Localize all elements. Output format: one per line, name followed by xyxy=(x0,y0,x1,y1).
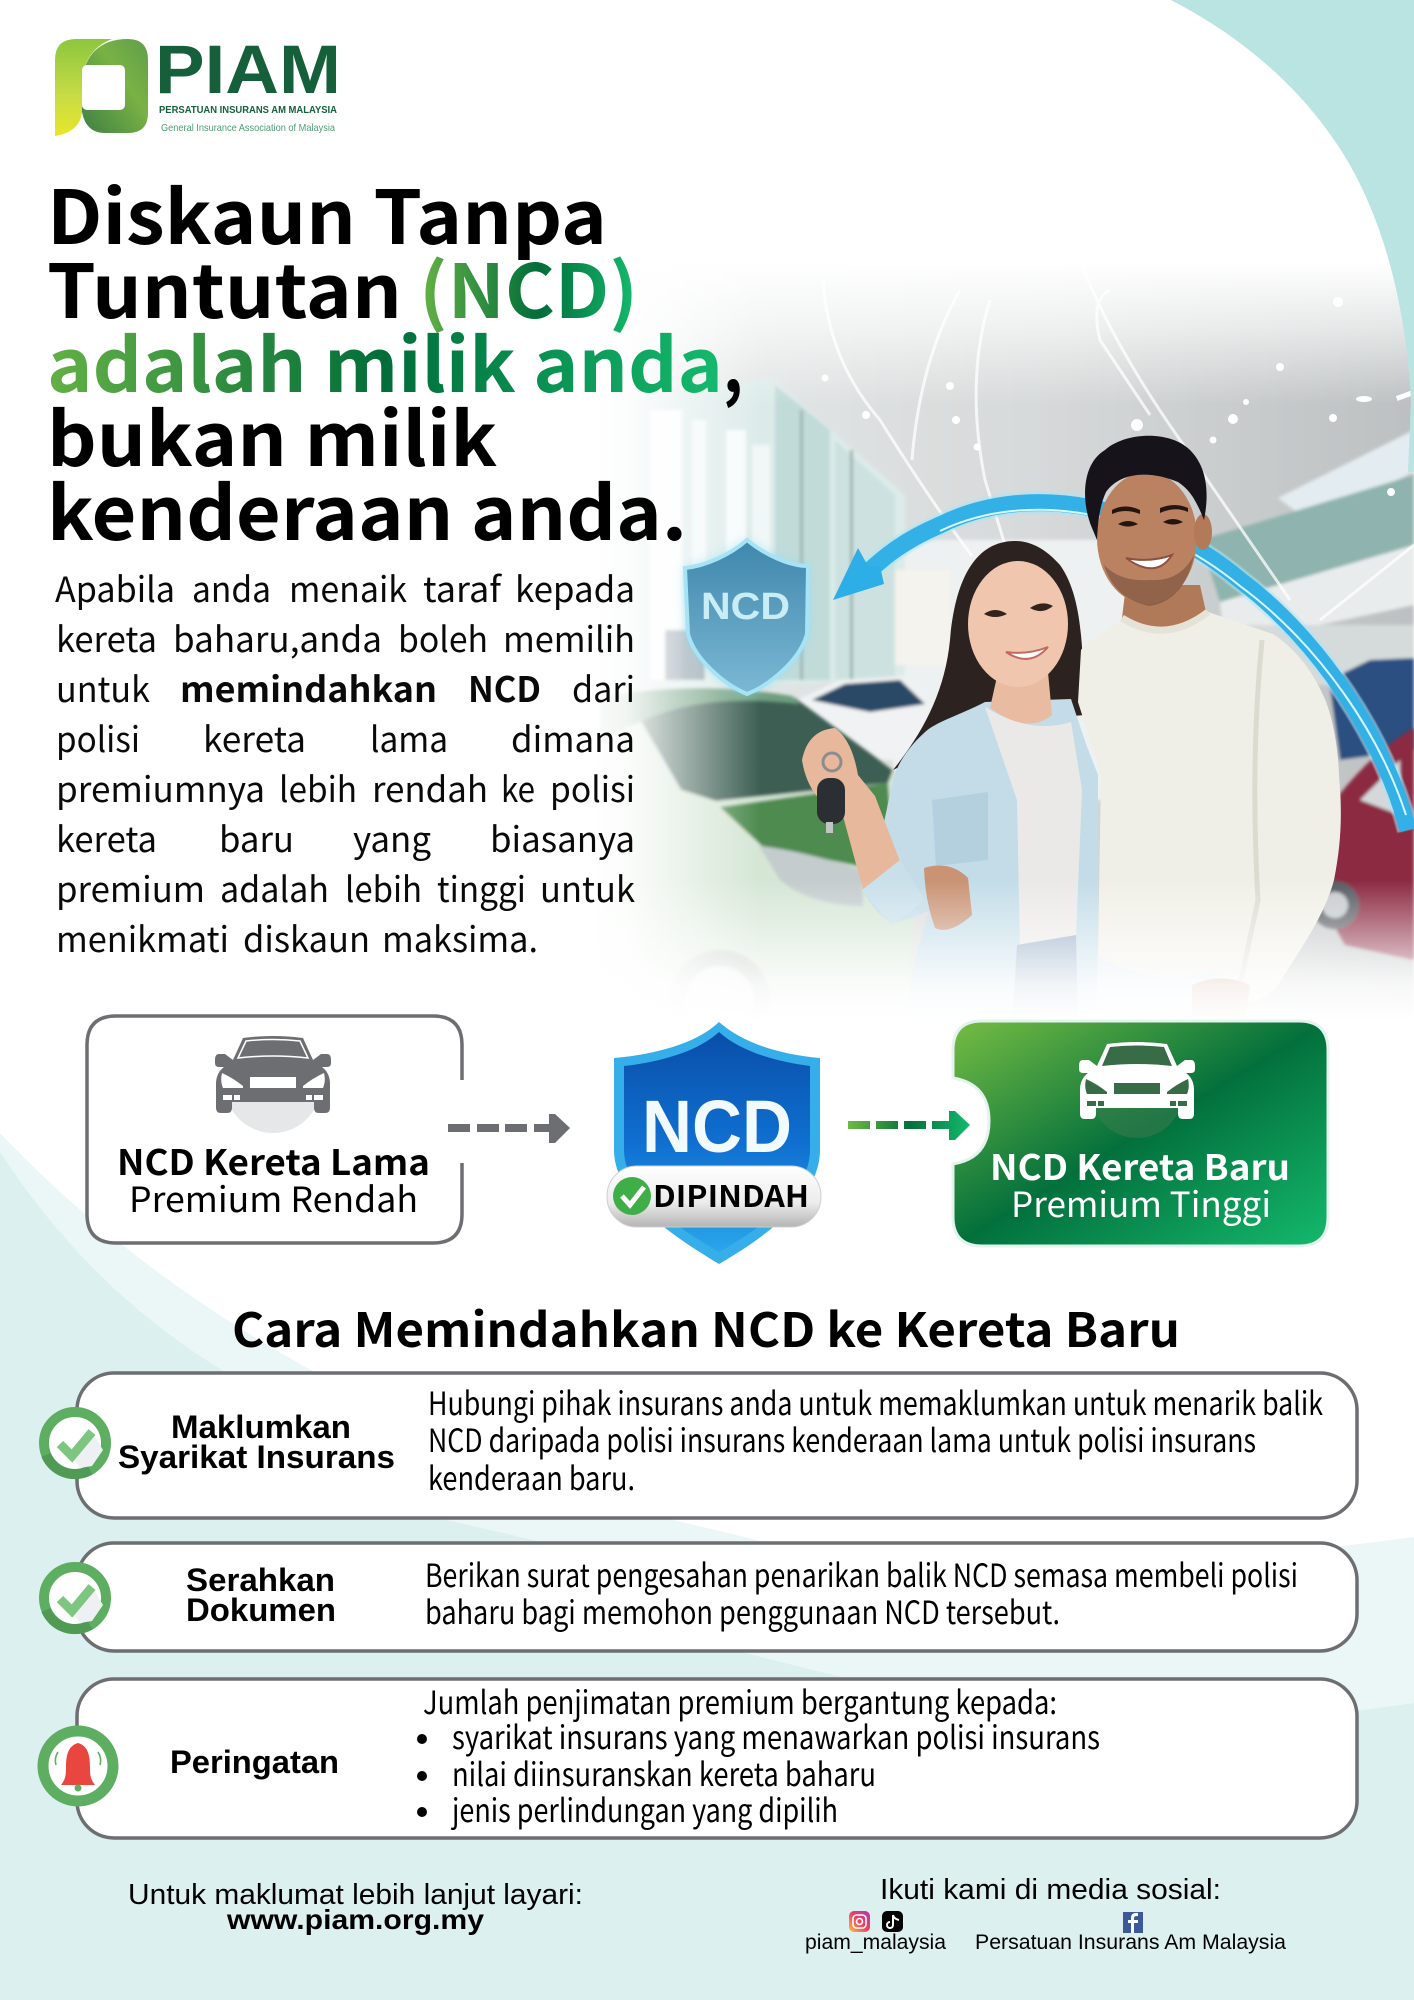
logo English name: General Insurance Association of Malaysia xyxy=(161,122,335,134)
man: neck xyxy=(1122,585,1206,628)
intro paragraph: taraf xyxy=(423,562,503,613)
footer: website: Untuk maklumat lebih lanjut layari: xyxy=(128,1879,583,1911)
title: Diskaun Tanpa xyxy=(47,159,607,266)
photo: showroom couple with cars xyxy=(603,283,1414,1002)
title: (NCD) xyxy=(419,233,638,340)
woman: tee xyxy=(985,707,1082,948)
man: sweater xyxy=(1078,612,1341,976)
background: top-right teal curve xyxy=(1171,0,1414,472)
man: beard shadow xyxy=(1104,555,1194,606)
step title: Syarikat Insurans xyxy=(118,1439,395,1475)
text: NCD Kereta Lama: NCD Kereta Lama xyxy=(117,1135,430,1186)
intro paragraph: memindahkan xyxy=(180,662,437,713)
woman: shirt xyxy=(865,699,1098,959)
logo: PIAM xyxy=(55,31,341,136)
step text xyxy=(428,1379,1323,1500)
step text: baharu bagi memohon penggunaan NCD tersebut. xyxy=(425,1588,1060,1634)
intro paragraph: baharu,anda xyxy=(173,612,382,663)
intro paragraph: rendah xyxy=(372,762,488,813)
photo: blue arc arrow xyxy=(833,503,1408,830)
reminder text xyxy=(417,1678,1100,1832)
reminder text: jenis perlindungan yang dipilih xyxy=(450,1786,838,1832)
photo: red car xyxy=(1311,728,1414,960)
reminder text: syarikat insurans yang menawarkan polisi insurans xyxy=(452,1713,1100,1759)
intro paragraph: dimana xyxy=(511,712,635,763)
photo background: showroom interior xyxy=(647,283,1414,984)
logo icon xyxy=(55,39,148,136)
photo: bottom fade xyxy=(641,885,1414,1019)
photo: green car xyxy=(610,686,896,976)
panel: new car NCD xyxy=(953,1021,1328,1246)
text: Premium Rendah: Premium Rendah xyxy=(129,1172,418,1223)
title xyxy=(47,159,743,562)
intro paragraph: lebih xyxy=(345,862,422,913)
intro paragraph: lebih xyxy=(279,762,357,813)
intro paragraph: untuk xyxy=(56,662,150,713)
panel: old car NCD xyxy=(87,1016,470,1243)
text: NCD Kereta Baru: NCD Kereta Baru xyxy=(990,1140,1290,1191)
step text: kenderaan baru. xyxy=(428,1454,635,1500)
intro paragraph: maksima. xyxy=(382,912,538,963)
intro paragraph: biasanya xyxy=(490,812,635,863)
footer: website: www.piam.org.my xyxy=(226,1904,484,1935)
title: kenderaan anda. xyxy=(47,455,687,562)
intro paragraph: polisi xyxy=(56,712,140,763)
photo: small NCD shield xyxy=(685,540,808,694)
intro paragraph: premium xyxy=(56,862,205,913)
background: lower light band xyxy=(0,1133,1414,2000)
woman: arm holding key xyxy=(802,728,901,890)
step title: Maklumkan xyxy=(171,1409,351,1445)
intro paragraph: dari xyxy=(572,662,635,713)
title: , xyxy=(723,307,743,414)
badge: DIPINDAH pill: DIPINDAH xyxy=(653,1172,809,1216)
intro paragraph: Apabila xyxy=(55,562,175,613)
intro paragraph: lama xyxy=(370,712,448,763)
woman: hair xyxy=(893,541,1085,770)
badge: DIPINDAH pill xyxy=(607,1166,821,1227)
icon: large NCD shield with DIPINDAH badge: NCD xyxy=(642,1085,792,1168)
title: bukan milik xyxy=(47,381,497,488)
icon: instagram xyxy=(849,1911,870,1932)
intro paragraph: menikmati xyxy=(56,912,229,963)
intro paragraph: adalah xyxy=(220,862,329,913)
icon: check xyxy=(44,1567,106,1629)
footer: social media: Ikuti kami di media sosial: xyxy=(880,1874,1221,1906)
woman: neck xyxy=(990,672,1052,724)
title: Tuntutan xyxy=(47,233,402,340)
panel: step 1 xyxy=(44,1373,1357,1518)
photo: woman xyxy=(802,541,1098,1025)
arrow: green dashed xyxy=(848,1111,970,1140)
intro paragraph: menaik xyxy=(289,562,407,613)
step title: Dokumen xyxy=(186,1592,336,1628)
step title: Serahkan xyxy=(186,1562,335,1598)
icon: tiktok xyxy=(882,1911,903,1932)
intro paragraph xyxy=(55,562,635,963)
photo: ceiling lights xyxy=(822,297,1414,496)
step title xyxy=(186,1562,336,1628)
reminder title: Peringatan xyxy=(170,1744,339,1780)
intro paragraph: kereta xyxy=(56,612,157,663)
photo: fade overlays xyxy=(660,233,1410,389)
woman: sleeve xyxy=(862,860,901,924)
photo: man xyxy=(924,436,1341,1025)
intro paragraph: kereta xyxy=(203,712,306,763)
woman: face xyxy=(968,561,1068,687)
intro paragraph: kereta xyxy=(56,812,157,863)
text: Premium Tinggi: Premium Tinggi xyxy=(1011,1177,1271,1228)
intro paragraph: polisi xyxy=(550,762,635,813)
photo: small NCD shield: NCD xyxy=(701,586,790,628)
arrow: grey dashed xyxy=(448,1114,570,1143)
intro paragraph: baru xyxy=(219,812,294,863)
background: lower teal area xyxy=(0,1152,1414,2000)
man: hand on woman xyxy=(924,866,972,930)
man: collar xyxy=(1122,612,1208,630)
man: face xyxy=(1097,472,1197,604)
intro paragraph: memilih xyxy=(503,612,635,663)
intro paragraph: NCD xyxy=(468,662,541,713)
footer: social media xyxy=(805,1874,1286,1954)
footer: social media: Persatuan Insurans Am Malaysia xyxy=(975,1931,1286,1954)
panel: step 2 xyxy=(44,1543,1357,1651)
intro paragraph: anda xyxy=(192,562,271,613)
intro paragraph: boleh xyxy=(398,612,488,663)
step title xyxy=(118,1409,395,1475)
intro paragraph: kepada xyxy=(515,562,635,613)
icon: grey car xyxy=(215,1036,331,1133)
intro paragraph: ke xyxy=(501,762,535,813)
woman: shirt pocket xyxy=(932,792,988,866)
footer: social media: piam_malaysia xyxy=(805,1931,946,1954)
key fob xyxy=(817,753,845,833)
logo wordmark: PIAM xyxy=(155,31,341,108)
reminder text: Jumlah penjimatan premium bergantung kepada: xyxy=(423,1678,1057,1724)
icon: large NCD shield with DIPINDAH badge xyxy=(607,1022,821,1264)
icon: check xyxy=(44,1412,106,1474)
reminder text: nilai diinsuranskan kereta baharu xyxy=(452,1750,876,1796)
icon: bell xyxy=(43,1731,113,1801)
logo Malay name: PERSATUAN INSURANS AM MALAYSIA xyxy=(159,105,337,116)
man: jeans xyxy=(1098,955,1250,1025)
man: hair xyxy=(1085,436,1207,540)
icon: white car xyxy=(1079,1042,1195,1138)
icon: facebook xyxy=(1123,1912,1143,1933)
woman: jeans xyxy=(1015,935,1076,979)
intro paragraph: premiumnya xyxy=(56,762,265,813)
intro paragraph: yang xyxy=(353,812,431,863)
intro paragraph: tinggi xyxy=(437,862,526,913)
photo: thin light lines xyxy=(828,304,1414,621)
footer: website xyxy=(128,1879,583,1935)
panel: reminder xyxy=(43,1678,1357,1838)
heading: how to transfer: Cara Memindahkan NCD ke Kereta Baru xyxy=(232,1292,1180,1361)
intro paragraph: untuk xyxy=(540,862,635,913)
man: sleeve seam xyxy=(1244,640,1264,958)
title: adalah milik anda xyxy=(47,307,723,414)
step text: NCD daripada polisi insurans kenderaan lama untuk polisi insurans xyxy=(428,1416,1256,1462)
step text xyxy=(425,1551,1298,1634)
intro paragraph: diskaun xyxy=(243,912,370,963)
